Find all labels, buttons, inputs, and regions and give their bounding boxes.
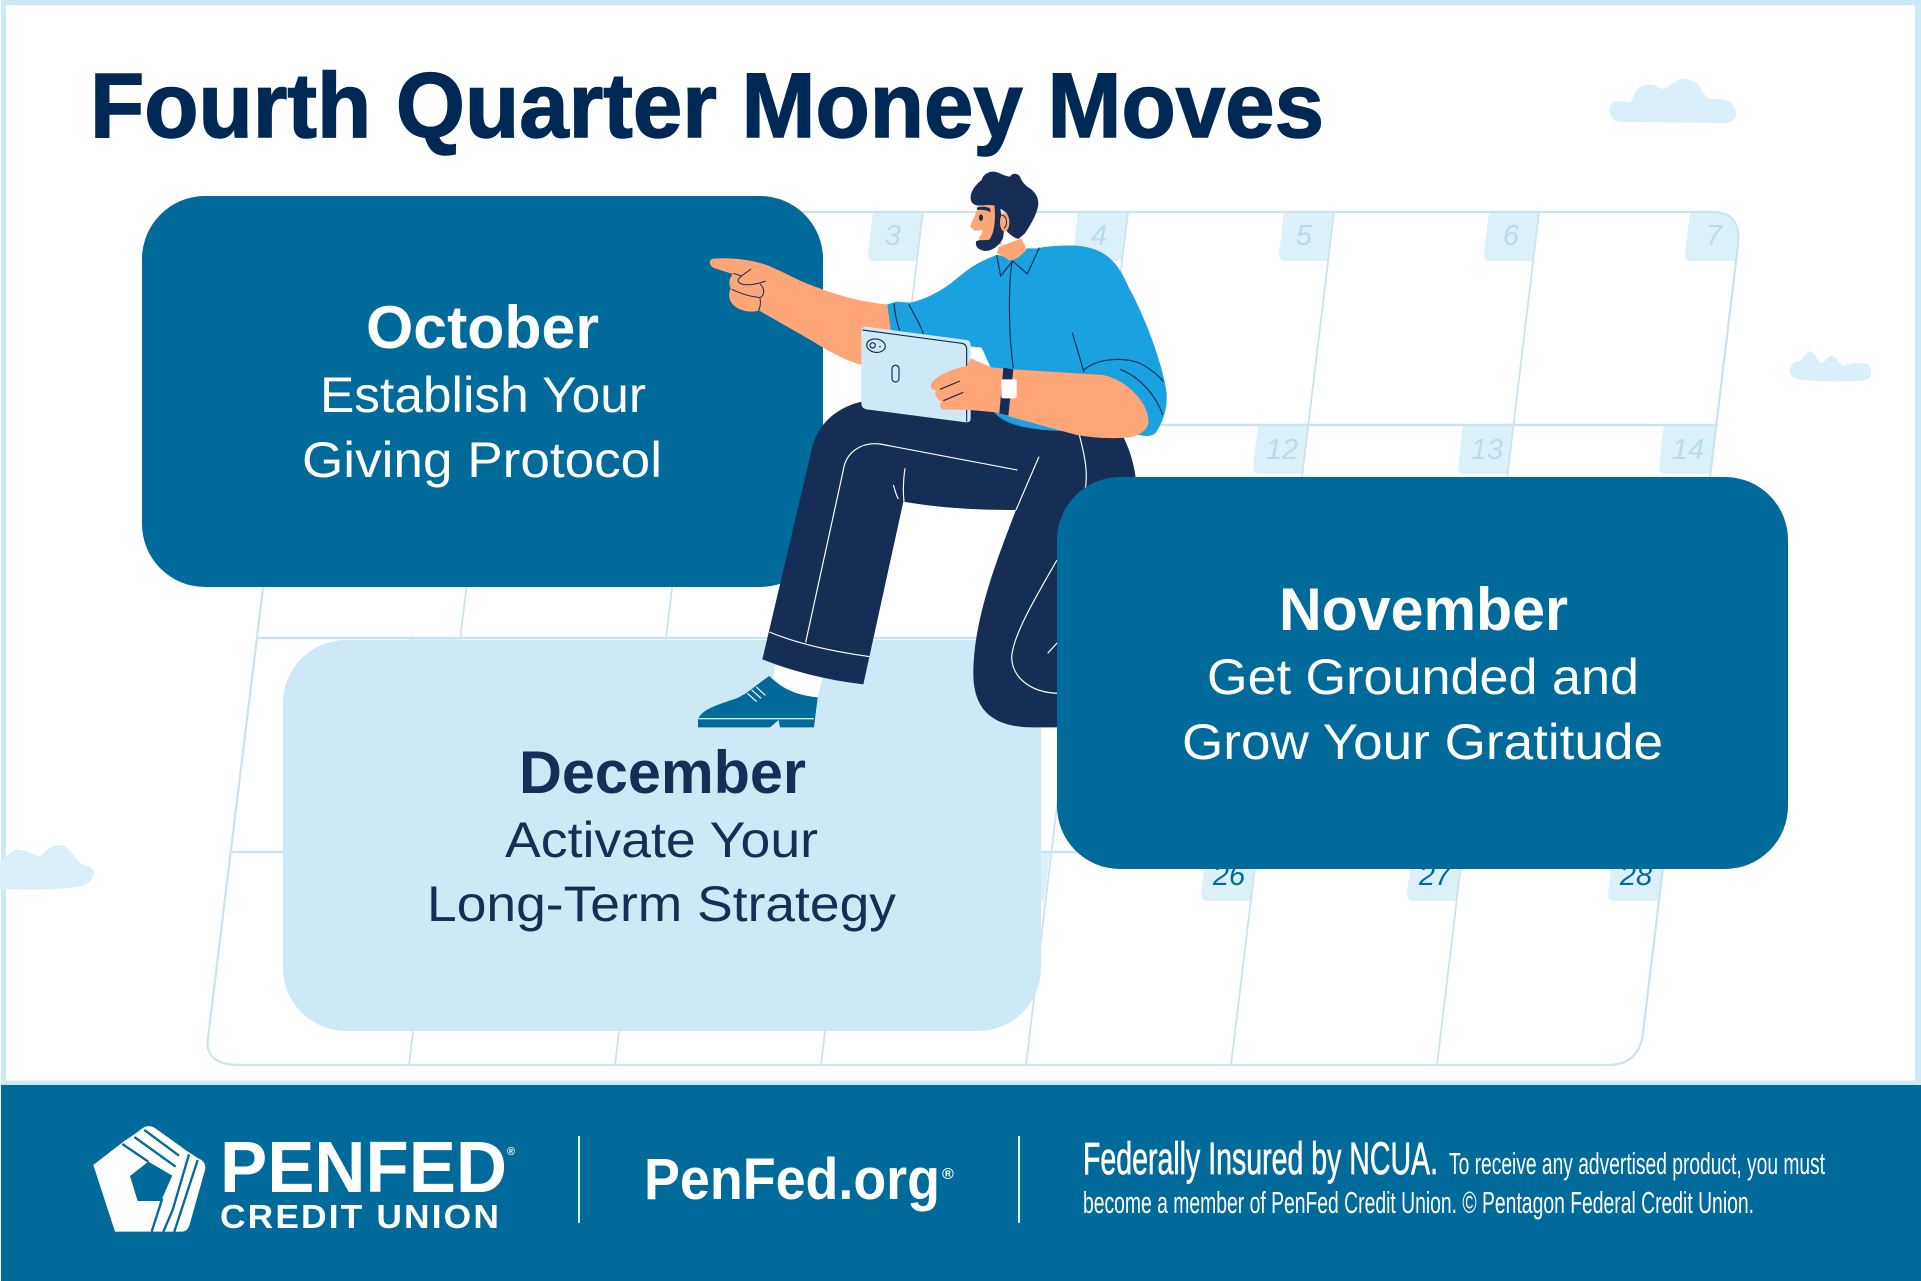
head <box>970 172 1038 251</box>
watch <box>999 368 1017 416</box>
shirt <box>887 246 1167 436</box>
calendar grid: 27 <box>1418 860 1453 892</box>
website: PenFed.org <box>644 1147 940 1212</box>
illustration: pointing man with tablet <box>698 172 1167 727</box>
PenFed wordmark: ® <box>507 1146 515 1158</box>
October description: Establish Your <box>320 367 646 423</box>
calendar numbers: 14 <box>1672 434 1704 466</box>
website: ® <box>942 1166 954 1183</box>
forearm and hand holding tablet <box>931 358 1148 438</box>
October description <box>302 367 662 488</box>
shirt details <box>894 248 1163 415</box>
footer band <box>1 1085 1921 1281</box>
November heading: November <box>1279 576 1568 643</box>
calendar outline <box>208 212 1738 1065</box>
PenFed wordmark: PENFED <box>220 1128 507 1208</box>
shoe <box>698 676 818 727</box>
panel: December <box>283 640 1041 1031</box>
cloud: top right <box>1610 79 1736 123</box>
calendar grid <box>208 212 1738 1065</box>
trouser creases <box>769 435 1086 693</box>
cloud: right <box>1790 351 1871 382</box>
neck <box>997 238 1026 263</box>
December heading: December <box>519 739 806 806</box>
calendar numbers: 5 <box>1296 220 1313 252</box>
October description: Giving Protocol <box>302 432 662 488</box>
disclaimer: Federally Insured by NCUA. <box>1083 1133 1438 1184</box>
trousers <box>762 400 1136 727</box>
calendar numbers: 7 <box>1706 220 1724 252</box>
calendar numbers: 4 <box>1091 220 1107 252</box>
October heading: October <box>366 294 599 361</box>
calendar grid: 26 <box>1212 860 1246 892</box>
calendar grid: 28 <box>1619 860 1652 892</box>
cloud: left <box>0 845 94 890</box>
calendar numbers: 12 <box>1266 434 1298 466</box>
November description: Grow Your Gratitude <box>1182 714 1663 770</box>
calendar numbers <box>885 220 1724 466</box>
November description: Get Grounded and <box>1207 649 1639 705</box>
panel: October <box>142 196 823 587</box>
December description <box>427 812 896 932</box>
November description <box>1182 649 1663 770</box>
calendar numbers: 13 <box>1471 434 1503 466</box>
calendar numbers: 6 <box>1503 220 1520 252</box>
sock <box>773 665 823 698</box>
title: Fourth Quarter Money Moves <box>90 55 1324 157</box>
PenFed wordmark: CREDIT UNION <box>220 1198 501 1235</box>
disclaimer <box>1083 1133 1825 1220</box>
calendar date tabs <box>405 212 1738 901</box>
December description: Activate Your <box>505 812 818 868</box>
tablet <box>861 327 971 422</box>
calendar numbers: 3 <box>885 220 901 252</box>
pointing arm and hand <box>710 258 891 365</box>
icon: PenFed logo mark <box>93 1126 205 1232</box>
panel: November <box>1057 477 1788 869</box>
December description: Long-Term Strategy <box>427 876 896 932</box>
